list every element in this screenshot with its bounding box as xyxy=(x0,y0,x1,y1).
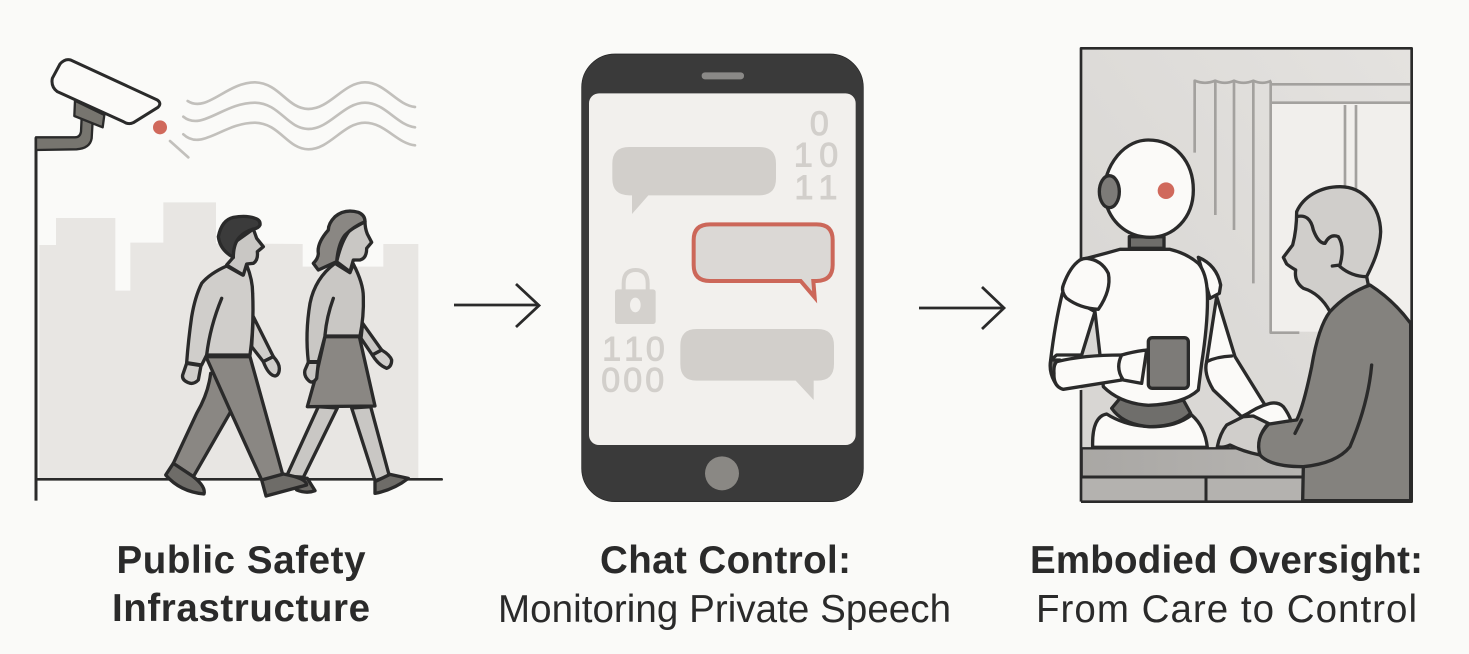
signal waves xyxy=(170,82,415,157)
phone screen xyxy=(589,93,856,445)
binary digits: top right: 10 xyxy=(794,137,838,175)
arrow: safety to chat xyxy=(454,284,539,327)
arrow: chat to oversight xyxy=(919,287,1004,329)
binary digits: top right xyxy=(794,105,838,207)
binary digits: top right: 11 xyxy=(795,169,837,207)
window xyxy=(1271,82,1411,333)
surveillance camera on pole xyxy=(36,60,160,501)
speaker xyxy=(702,72,744,79)
red sensor dot xyxy=(153,120,167,134)
heading: chat control: Monitoring Private Speech xyxy=(498,588,951,631)
binary digits: lower left xyxy=(601,330,665,399)
phone body xyxy=(582,54,863,502)
panel: public safety illustration xyxy=(36,60,442,501)
heading: embodied oversight xyxy=(1030,539,1423,631)
picture frame xyxy=(1081,48,1412,502)
binary digits: lower left: 000 xyxy=(601,361,664,399)
curtain xyxy=(1195,81,1271,283)
person's hand xyxy=(1217,416,1268,455)
room background xyxy=(1081,48,1412,502)
woman walking xyxy=(287,211,408,493)
chat bubble: bottom right xyxy=(680,329,834,400)
ground line xyxy=(36,475,442,483)
heading: public safety xyxy=(112,539,370,630)
robot xyxy=(1050,140,1291,447)
heading: chat control xyxy=(498,539,951,631)
heading: public safety: Infrastructure xyxy=(112,587,370,630)
heading: embodied oversight: Embodied Oversight: xyxy=(1030,539,1423,582)
home button xyxy=(705,456,739,490)
padlock icon xyxy=(615,270,656,324)
person xyxy=(1258,187,1411,501)
city skyline xyxy=(39,202,418,479)
heading: embodied oversight: From Care to Control xyxy=(1036,588,1417,631)
heading: chat control: Chat Control: xyxy=(600,539,851,582)
table xyxy=(1082,448,1303,501)
chat bubble: top left xyxy=(612,147,776,214)
heading: public safety: Public Safety xyxy=(116,539,366,582)
binary digits: top right: 0 xyxy=(810,105,829,143)
chat bubble: flagged xyxy=(694,224,833,297)
man walking xyxy=(166,216,307,496)
binary digits: lower left: 110 xyxy=(602,330,665,368)
panel: robot and person xyxy=(1050,48,1412,502)
panel: smartphone xyxy=(582,54,863,502)
